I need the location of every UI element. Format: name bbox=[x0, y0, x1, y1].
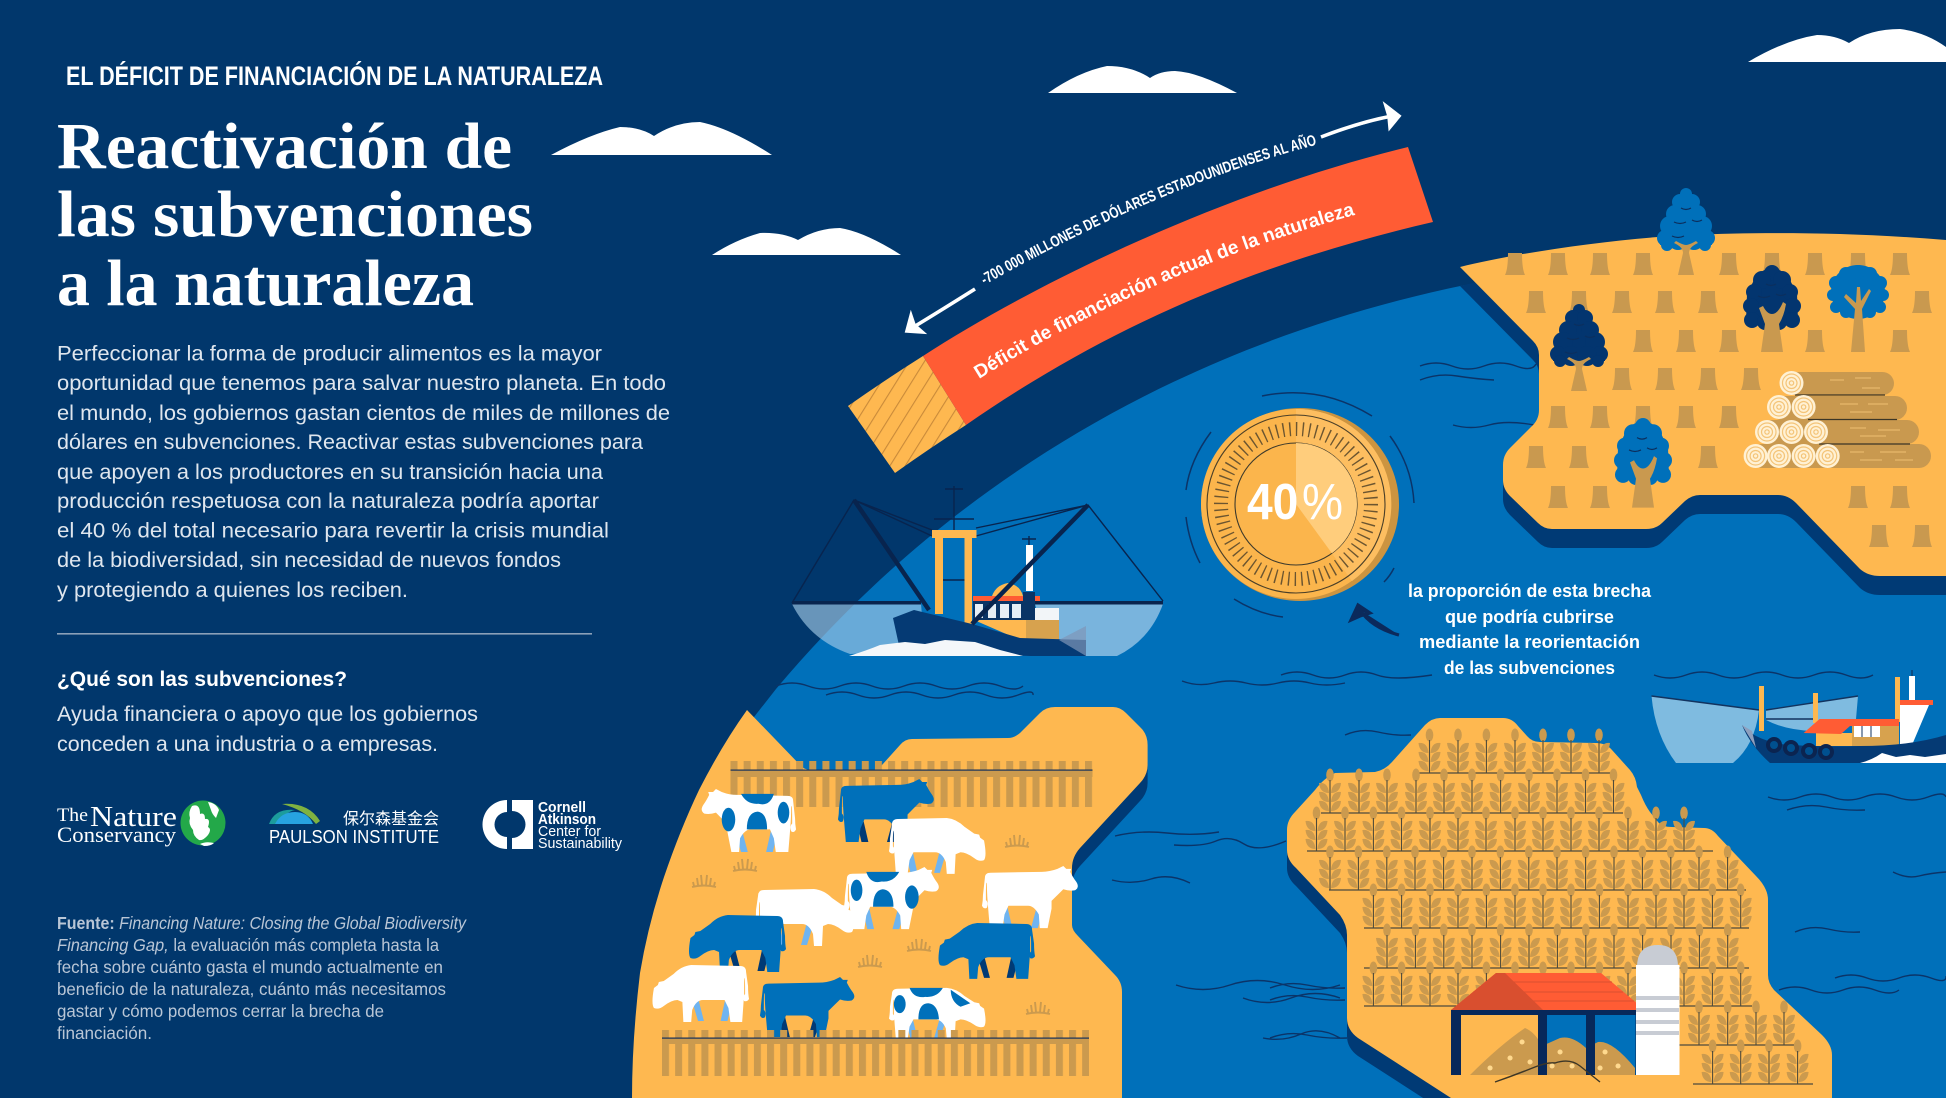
rigging bbox=[792, 486, 1163, 603]
cows bbox=[652, 779, 1078, 1039]
body text: el mundo, los gobiernos gastan cientos de miles de millones de bbox=[57, 402, 670, 425]
gap amount label bbox=[904, 101, 1402, 334]
barn roof bbox=[1451, 973, 1645, 1010]
cow: spotted bbox=[702, 789, 796, 852]
ocean planet bbox=[640, 285, 1946, 1098]
coin caption arrow bbox=[1351, 605, 1399, 635]
trawler left bbox=[792, 486, 1163, 656]
logo: The Nature Conservancy bbox=[57, 800, 226, 847]
logo: The Nature Conservancy: Nature bbox=[90, 801, 177, 833]
forest land bbox=[1460, 233, 1946, 576]
land: pasture bbox=[632, 707, 1148, 1098]
logo: Paulson Institute bbox=[269, 804, 439, 847]
cow: blue lower bbox=[760, 977, 854, 1037]
title: las subvenciones bbox=[57, 178, 533, 251]
nets bbox=[792, 604, 925, 654]
logo: Paulson Institute: PAULSON INSTITUTE bbox=[269, 827, 439, 847]
wheat land bbox=[1287, 718, 1832, 1098]
body text: que apoyen a los productores en su transición hacia una bbox=[57, 461, 603, 484]
body text: el 40 % del total necesario para revertir la crisis mundial bbox=[57, 520, 609, 542]
cow: white right bbox=[982, 866, 1078, 928]
body text bbox=[57, 342, 670, 602]
definition: conceden a una industria o a empresas. bbox=[57, 733, 438, 756]
coin caption: de las subvenciones bbox=[1444, 657, 1615, 678]
waves bbox=[776, 363, 1946, 1039]
source note: fecha sobre cuánto gasta el mundo actualmente en bbox=[57, 957, 443, 977]
question heading: ¿Qué son las subvenciones? bbox=[57, 668, 347, 691]
body text: Perfeccionar la forma de producir alimentos es la mayor bbox=[57, 342, 602, 366]
logo: The Nature Conservancy: The bbox=[57, 805, 88, 826]
bar: funding gap bbox=[923, 147, 1433, 425]
booms bbox=[854, 500, 1088, 624]
arrow left bbox=[907, 289, 975, 332]
pasture shadow bbox=[632, 725, 1148, 1098]
cow: blue grazing right side bbox=[938, 923, 1035, 979]
source note: gastar y cómo podemos cerrar la brecha de bbox=[57, 1001, 384, 1021]
logo: Cornell Atkinson bbox=[482, 800, 623, 852]
body text: y protegiendo a quienes los reciben. bbox=[57, 579, 408, 602]
clouds bbox=[551, 29, 1946, 255]
log pile bbox=[1744, 371, 1931, 468]
cow: blue grazing left bbox=[689, 915, 786, 972]
40 percent share bbox=[1296, 443, 1357, 553]
arrow right bbox=[1321, 106, 1399, 137]
source note: beneficio de la naturaleza, cuánto más necesitamos bbox=[57, 979, 446, 999]
bow wave bbox=[849, 640, 1023, 656]
bar: existing funding hatch bbox=[848, 356, 966, 473]
cow: blue bbox=[838, 779, 934, 842]
fence top bbox=[730, 761, 1092, 807]
superstructure bbox=[1900, 705, 1929, 745]
logo: The Nature Conservancy: Conservancy bbox=[57, 822, 176, 847]
coin value: 40% bbox=[1247, 473, 1343, 530]
grain pile bbox=[1470, 1028, 1635, 1075]
logo: Cornell Atkinson: Center for bbox=[538, 824, 601, 840]
pasture bbox=[632, 707, 1148, 1098]
hull bbox=[1742, 725, 1946, 763]
trawler right bbox=[1652, 670, 1946, 763]
silo bbox=[1636, 945, 1680, 1075]
definition bbox=[57, 703, 478, 756]
cow: spotted centre bbox=[844, 867, 939, 929]
cabin bbox=[1026, 545, 1033, 591]
cow: white grazing centre bbox=[755, 889, 854, 946]
body text: de la biodiversidad, sin necesidad de nuevos fondos bbox=[57, 549, 561, 572]
tyres bbox=[1766, 737, 1834, 760]
land: wheat field bbox=[1287, 718, 1832, 1098]
gap amount label: -700 000 MILLONES DE DÓLARES ESTADOUNIDENSES AL AÑO bbox=[982, 134, 1316, 282]
coin caption: la proporción de esta brecha bbox=[1408, 580, 1652, 601]
cow: white grazing bbox=[889, 818, 986, 874]
source note: Financing Gap, la evaluación más completa hasta la bbox=[57, 935, 439, 955]
trees bbox=[1550, 188, 1889, 508]
coin caption: que podría cubrirse bbox=[1445, 606, 1614, 627]
masts bbox=[932, 530, 976, 538]
kicker: EL DÉFICIT DE FINANCIACIÓN DE LA NATURALEZA bbox=[66, 60, 603, 91]
nets bbox=[1652, 696, 1759, 763]
masts bbox=[1759, 686, 1764, 731]
title: a la naturaleza bbox=[57, 247, 474, 320]
logo: Cornell Atkinson: Sustainability bbox=[538, 836, 623, 852]
forest land shadow bbox=[1460, 252, 1946, 595]
cow: white grazing left bbox=[652, 965, 749, 1022]
logo: Cornell Atkinson: Cornell bbox=[538, 800, 586, 816]
source note: Fuente: Financing Nature: Closing the Global Biodiversity bbox=[57, 913, 467, 933]
hull bbox=[974, 620, 1059, 640]
logo: Paulson Institute: 保尔森基金会 bbox=[343, 805, 439, 829]
barn bbox=[1451, 973, 1645, 1082]
source note bbox=[57, 913, 467, 1043]
cow: spotted grazing bbox=[889, 988, 986, 1039]
wake bbox=[1860, 753, 1946, 763]
coin bbox=[1186, 393, 1414, 617]
mound bbox=[1495, 1061, 1600, 1082]
title bbox=[57, 110, 533, 320]
definition: Ayuda financiera o apoyo que los gobiernos bbox=[57, 703, 478, 726]
source note: financiación. bbox=[57, 1023, 152, 1043]
bar label: Déficit de financiación actual de la naturaleza bbox=[973, 206, 1356, 378]
logo: Cornell Atkinson: Atkinson bbox=[538, 812, 596, 828]
body text: dólares en subvenciones. Reactivar estas subvenciones para bbox=[57, 431, 643, 454]
body text: oportunidad que tenemos para salvar nuestro planeta. En todo bbox=[57, 372, 666, 395]
tree stumps bbox=[1505, 253, 1932, 547]
grass tufts bbox=[692, 835, 1050, 1014]
motion arcs bbox=[1186, 393, 1414, 617]
land: forest bbox=[1460, 188, 1946, 595]
fence bottom bbox=[662, 1030, 1089, 1076]
title: Reactivación de bbox=[57, 110, 512, 183]
wheat land shadow bbox=[1287, 736, 1832, 1098]
body text: producción respetuosa con la naturaleza podría aportar bbox=[57, 490, 599, 513]
coin caption: mediante la reorientación bbox=[1419, 631, 1640, 652]
coin caption bbox=[1408, 580, 1652, 678]
wheat rows bbox=[1306, 728, 1813, 1084]
funding gap bar bbox=[848, 147, 1433, 473]
